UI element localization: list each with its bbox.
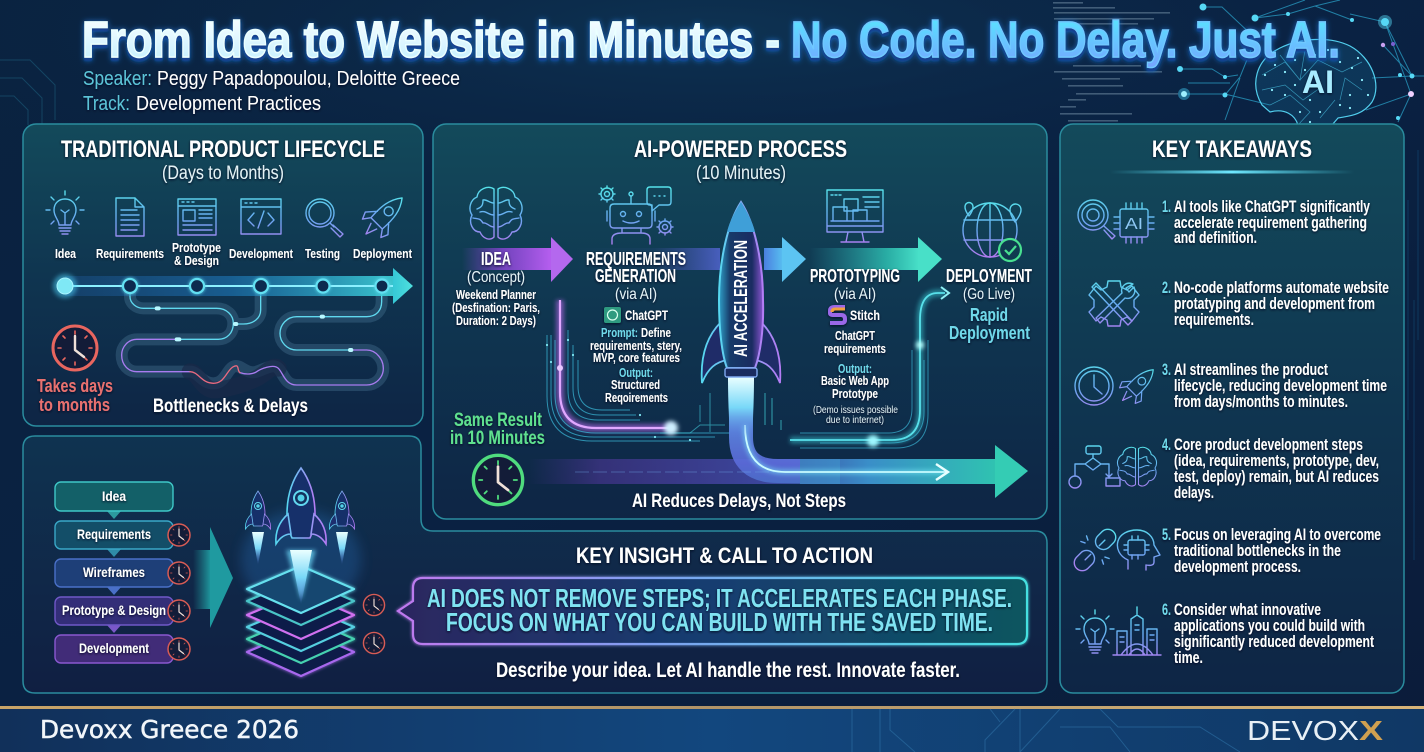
step: idea box: Idea [102, 488, 126, 504]
circuit lines right [765, 287, 949, 448]
circuit lines left [547, 300, 730, 441]
panel: AI-powered process [433, 124, 1047, 519]
step: wireframes box: Wireframes [83, 564, 145, 580]
step: requirements generation: Structured [611, 378, 660, 392]
step stack [55, 482, 173, 663]
takeaway 2 [1089, 279, 1389, 329]
icon: monitor prototype [827, 190, 883, 242]
step: requirements generation: (via AI) [615, 286, 657, 303]
takeaway 5: development process. [1174, 558, 1301, 576]
step: prototyping: Prototype [832, 387, 878, 401]
step: deployment [946, 266, 1032, 343]
step: requirements generation: Output: [619, 366, 653, 380]
takeaway 4: 4. [1162, 436, 1171, 454]
step: prototyping: Basic Web App [821, 374, 889, 388]
icon: lightbulb [46, 191, 84, 234]
takeaway 6: time. [1174, 649, 1203, 667]
step: requirements generation: MVP, core features [593, 351, 680, 365]
panel: bottom flow and key insight [23, 436, 1047, 693]
step: requirements generation: Reqoirements [605, 391, 668, 405]
takeaway 2: requirements. [1174, 311, 1254, 329]
AI reduces delays, not steps: AI Reduces Delays, Not Steps [632, 491, 846, 512]
takeaway 6: 6. [1162, 601, 1171, 619]
step: prototyping: due to internet) [826, 414, 884, 426]
speaker and track: Peggy Papadopoulou, Deloitte Greece [157, 68, 460, 90]
takeaway 5 [1065, 520, 1381, 580]
step: development box: Development [79, 640, 149, 656]
step labels: Prototype [172, 240, 221, 255]
step clocks [168, 524, 190, 660]
step: deployment: Rapid [970, 305, 1008, 325]
takeaway 6 [1076, 601, 1374, 667]
step labels: Idea [55, 246, 77, 261]
takes days to months: Takes days [37, 376, 113, 396]
Devoxx logo: DEVOX [1247, 715, 1359, 746]
step: deployment: DEPLOYMENT [946, 266, 1032, 286]
step labels: & Design [174, 253, 219, 268]
step: requirements generation: Prompt: [601, 326, 638, 340]
AI brain label: AI [1302, 64, 1334, 100]
heading: AI-powered: (10 Minutes) [696, 163, 786, 184]
big arrow [193, 527, 233, 628]
heading: traditional [61, 136, 385, 184]
long arrow: AI reduces delays [529, 380, 1028, 498]
speaker and track: Track: [83, 93, 130, 115]
bottlenecks and delays: Bottlenecks & Delays [153, 396, 308, 417]
step: requirements generation: GENERATION [595, 266, 676, 286]
step: prototyping: ChatGPT [835, 329, 875, 343]
icon: brain [470, 187, 522, 239]
step: development box [55, 635, 173, 663]
title: From Idea to Website in Minutes - [82, 11, 780, 68]
icon: magnifier [306, 199, 343, 237]
heading: traditional: (Days to Months) [162, 163, 284, 184]
timeline arrow with stage nodes [53, 268, 413, 304]
takeaway 4: delays. [1174, 484, 1214, 502]
step labels: Development [229, 246, 294, 261]
takeaway 3 [1075, 360, 1387, 411]
step: prototyping: (via AI) [834, 286, 876, 303]
takeaway 3: 3. [1162, 361, 1171, 379]
speaker and track: Development Practices [136, 93, 321, 115]
takeaway 1 [1078, 198, 1371, 247]
step: idea: IDEA [481, 249, 511, 269]
icon: red clock [53, 326, 97, 370]
takeaway 4 [1069, 436, 1379, 502]
step: prototype and design box: Prototype & Design [62, 602, 166, 618]
step: prototype and design box [55, 597, 173, 633]
panel: traditional product lifecycle [23, 124, 423, 426]
step: requirements generation: ChatGPT [625, 307, 668, 323]
step: requirements box [55, 521, 173, 557]
step: idea: (Desfination: Paris, [452, 301, 540, 315]
step labels: Requirements [96, 246, 164, 261]
step: requirements generation: REQUIREMENTS [586, 249, 686, 269]
takeaway 3: from days/months to minutes. [1174, 393, 1348, 411]
callout: AI does not remove steps: AI DOES NOT REMOVE STEPS; IT ACCELERATES EACH PHASE. [427, 583, 1012, 613]
takes days to months: to months [39, 395, 110, 415]
takeaway 1: 1. [1162, 198, 1171, 216]
footer event name: Devoxx Greece 2026 [40, 715, 299, 744]
layered stack [241, 510, 361, 676]
footer bar [0, 706, 1424, 752]
takeaway 6: Consider what innovative [1174, 601, 1321, 619]
step: requirements generation: Define [641, 326, 671, 340]
step: idea: Duration: 2 Days) [456, 314, 536, 328]
takeaway 1: AI [1125, 216, 1143, 233]
heading: traditional: TRADITIONAL PRODUCT LIFECYCLE [61, 136, 385, 163]
step: deployment: (Go Live) [963, 286, 1015, 303]
winding bottleneck path [122, 286, 383, 390]
takeaway 1: and definition. [1174, 229, 1257, 247]
heading: AI-powered [634, 136, 847, 184]
step: requirements generation: requirements, stery, [590, 339, 682, 353]
AI acceleration rocket: AI ACCELERATION [731, 240, 751, 357]
icon: document [116, 198, 144, 236]
speaker and track: Speaker: [83, 68, 152, 90]
decoration: code lines and AI brain network [1053, 0, 1424, 125]
same result in 10 minutes [450, 410, 545, 449]
takeaway 4: Core product development steps [1174, 436, 1363, 454]
panel: key takeaways [1060, 124, 1404, 693]
step labels [55, 240, 413, 268]
step: wireframes box [55, 559, 173, 595]
heading: key insight: KEY INSIGHT & CALL TO ACTION [576, 543, 873, 568]
icon: prototype window [178, 199, 216, 235]
step: prototyping: Stitch [850, 307, 880, 323]
takeaway 2: 2. [1162, 279, 1171, 297]
same result in 10 minutes: Same Result [454, 410, 543, 431]
step: idea: (Concept) [467, 269, 525, 286]
icon: globe with pins [963, 202, 1021, 261]
step: prototyping: Output: [838, 362, 872, 376]
step: deployment: Deployment [949, 323, 1030, 343]
takeaway 5: traditional bottlenecks in the [1174, 542, 1341, 560]
step: prototyping: requirements [824, 342, 886, 356]
icon: code window [241, 199, 281, 234]
Devoxx logo: X [1359, 715, 1383, 746]
icon: green clock [473, 455, 523, 505]
callout: AI does not remove steps [398, 578, 1027, 644]
step labels: Deployment [353, 246, 413, 261]
icon: rocket [355, 187, 413, 245]
icon: robot with gears [599, 186, 673, 244]
AI acceleration rocket [702, 202, 780, 438]
takeaway 3: AI streamlines the product [1174, 361, 1328, 379]
launching rockets [245, 468, 355, 605]
step: idea box [55, 482, 173, 519]
step labels: Testing [305, 246, 340, 261]
step: prototyping [810, 266, 900, 426]
stack clocks [363, 594, 385, 654]
heading: key takeaways: KEY TAKEAWAYS [1152, 136, 1312, 163]
call to action: Describe your idea. Let AI handle the rest. Innovate faster. [496, 659, 960, 682]
heading: AI-powered: AI-POWERED PROCESS [634, 136, 847, 163]
takeaway 5: 5. [1162, 526, 1171, 544]
step: prototyping: PROTOTYPING [810, 266, 900, 286]
speaker and track [83, 68, 460, 115]
process arrows [462, 237, 942, 282]
callout: AI does not remove steps: FOCUS ON WHAT YOU CAN BUILD WITH THE SAVED TIME. [446, 607, 993, 637]
takes days to months [37, 376, 113, 415]
same result in 10 minutes: in 10 Minutes [450, 428, 545, 449]
step: requirements generation [586, 249, 686, 405]
step: idea [452, 249, 540, 328]
step: requirements box: Requirements [77, 526, 151, 542]
heading underline [1110, 170, 1354, 174]
step: idea: Weekend Planner [456, 288, 536, 302]
step: prototyping: (Demo issues possible [813, 404, 898, 416]
title [82, 11, 1340, 68]
